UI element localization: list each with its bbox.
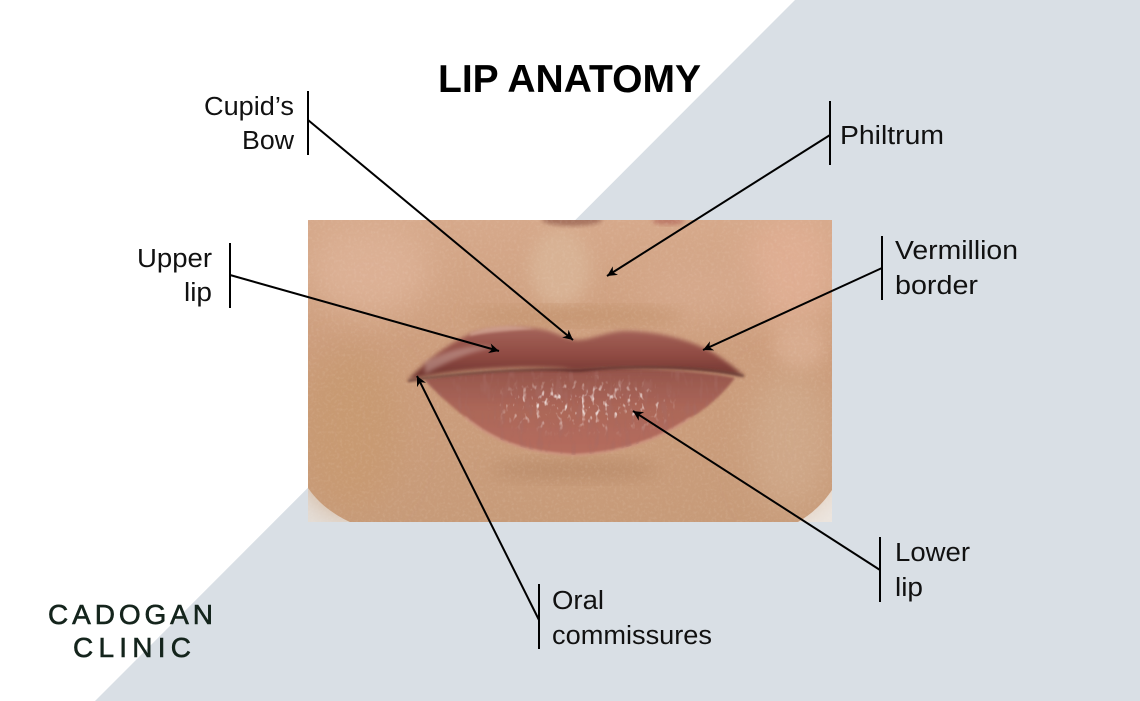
neck corners [308, 488, 350, 522]
upper lip highlights [425, 346, 495, 374]
logo: Cadogan Clinic: CLINIC [73, 632, 191, 663]
logo: Cadogan Clinic: CADOGAN [48, 599, 213, 630]
logo: Cadogan Clinic [48, 599, 213, 663]
callout: Philtrum [607, 101, 944, 276]
lower lip wrinkles and highlights [484, 372, 717, 455]
callout: Cupid's Bow: Bow [242, 127, 295, 155]
skin texture [308, 220, 832, 522]
lip photograph [300, 214, 835, 522]
callout: Lower lip: Lower [895, 539, 971, 567]
callout: Oral commissures: Oral [552, 587, 604, 615]
callout: Philtrum: Philtrum [840, 122, 944, 150]
callout: Cupid's Bow [204, 91, 573, 340]
callout: Lower lip [633, 411, 971, 602]
callout: Vermillion border: border [895, 272, 979, 300]
callout: Upper lip: Upper [137, 245, 213, 273]
upper lip [408, 327, 744, 380]
title: LIP ANATOMY [438, 58, 701, 101]
lower lip [425, 368, 735, 455]
callout: Oral commissures [417, 376, 712, 650]
mouth line [408, 367, 744, 381]
callout: Upper lip [137, 243, 499, 351]
lower lip rim [465, 417, 690, 455]
callout: Vermillion border: Vermillion [895, 237, 1018, 265]
callout: Oral commissures: commissures [552, 622, 712, 650]
callout: Upper lip: lip [184, 279, 212, 307]
callout: Lower lip: lip [895, 574, 923, 602]
facial tone [300, 214, 835, 510]
callout: Cupid's Bow: Cupid’s [204, 93, 294, 121]
callout: Vermillion border [703, 236, 1018, 350]
